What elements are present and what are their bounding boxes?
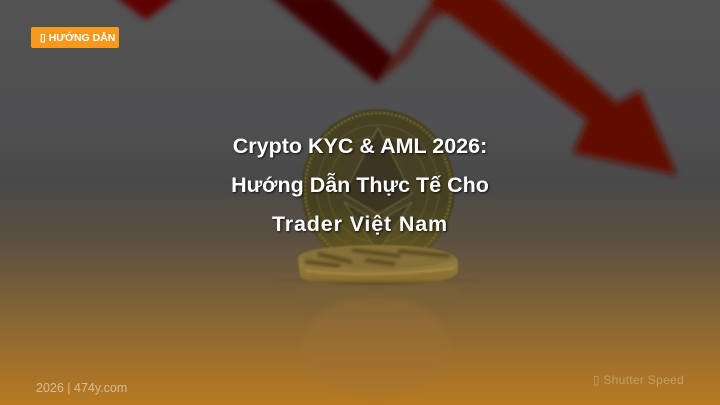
horizon shadow <box>275 279 480 281</box>
badge: guide label: ▯ HƯỚNG DẪN <box>40 32 115 44</box>
title <box>231 134 490 237</box>
coin reflection <box>342 298 412 308</box>
badge: guide label <box>31 27 119 48</box>
image credit: ▯ Shutter Speed <box>593 373 684 387</box>
large standing coin <box>300 108 456 248</box>
flat coin <box>298 245 458 285</box>
red arrow main <box>268 0 677 175</box>
title: Trader Việt Nam <box>272 212 448 236</box>
title: Hướng Dẫn Thực Tế Cho <box>231 173 489 197</box>
title: Crypto KYC & AML 2026: <box>233 134 487 158</box>
footer: year and site: 2026 | 474y.com <box>36 381 127 395</box>
red arrow left fragment <box>112 0 677 175</box>
